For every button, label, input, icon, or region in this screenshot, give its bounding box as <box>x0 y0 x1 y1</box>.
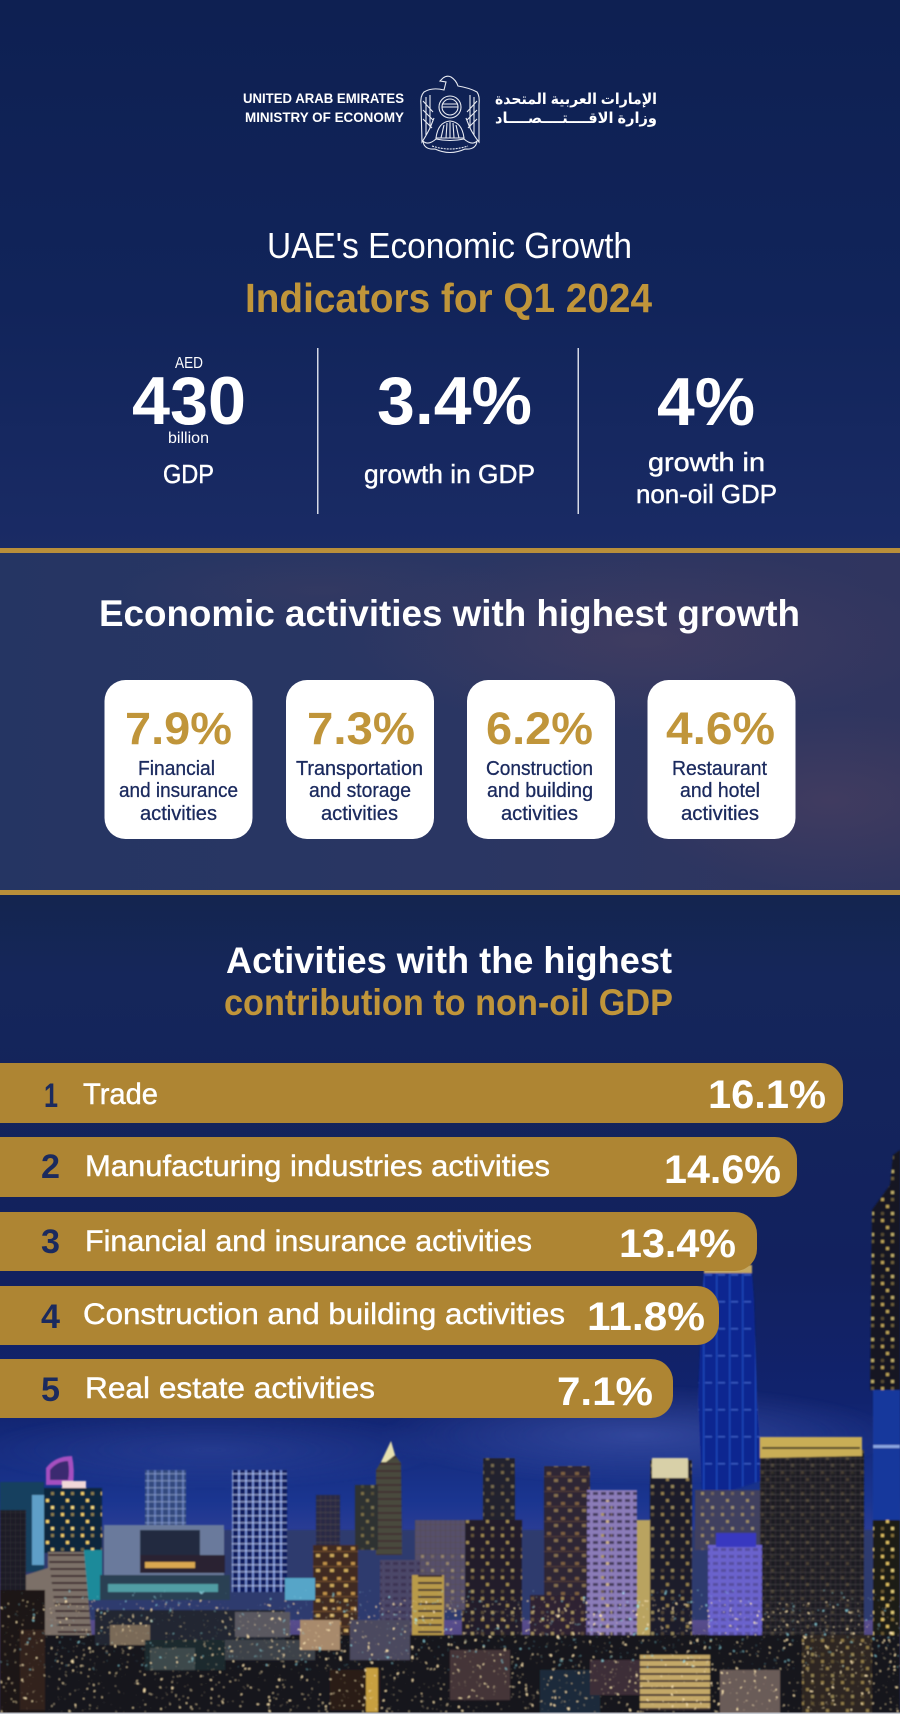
heading: highest contribution <box>224 940 673 1023</box>
olive spire tower <box>316 1441 402 1555</box>
stat: AED 430 billion GDP: billion <box>168 430 209 447</box>
card: restaurant: activities <box>681 803 759 825</box>
purple tall building <box>587 1490 650 1690</box>
ministry name English <box>243 91 404 125</box>
bar 2: manufacturing: 14.6% <box>664 1148 781 1192</box>
icon: UAE eagle emblem <box>421 76 479 152</box>
heading: highest contribution: contribution to non-oil GDP <box>224 982 673 1023</box>
bar 2: manufacturing: 2 <box>41 1148 60 1186</box>
card: transportation: 7.3% <box>307 703 415 754</box>
ministry name Arabic: الإمارات العربية المتحدة <box>495 91 657 108</box>
card: construction: activities <box>501 803 578 825</box>
bar 4: construction: Construction and building activities <box>83 1298 565 1331</box>
large dark building with lit crown <box>760 1437 864 1650</box>
stat: AED 430 billion GDP: GDP <box>163 459 214 489</box>
bar 3: financial: Financial and insurance activities <box>85 1225 532 1258</box>
dark towers middle <box>415 1458 692 1690</box>
brown building orange windows <box>313 1545 358 1640</box>
bar 4: construction: 4 <box>41 1298 60 1336</box>
foreground city <box>0 1590 900 1714</box>
bar 5: real estate: Real estate activities <box>85 1372 375 1405</box>
card: construction: 6.2% <box>486 703 593 754</box>
ministry name English: UNITED ARAB EMIRATES <box>243 91 404 106</box>
far horizon <box>0 1530 900 1620</box>
card: construction: Construction <box>486 758 593 780</box>
card: financial <box>104 680 252 839</box>
card: financial: and insurance <box>119 780 238 802</box>
title <box>245 225 652 321</box>
card: restaurant: 4.6% <box>666 703 775 754</box>
purple-lit mid building <box>708 1533 762 1645</box>
card: transportation: and storage <box>309 780 411 802</box>
stat: AED 430 billion GDP: AED <box>175 355 203 372</box>
blue tall building <box>232 1470 287 1592</box>
tan slab left <box>26 1552 92 1650</box>
chart: non-oil GDP contribution bars <box>0 1063 843 1418</box>
grey-blue lit building <box>104 1470 224 1575</box>
heading: highest contribution: Activities with the highest <box>226 940 672 981</box>
bar 3: financial <box>0 1212 757 1271</box>
ministry name English: MINISTRY OF ECONOMY <box>245 110 404 125</box>
bar 3: financial: 13.4% <box>619 1222 736 1266</box>
card: transportation <box>286 680 434 839</box>
card: construction: and building <box>487 780 593 802</box>
city skyline photo <box>0 1150 900 1714</box>
stat: 3.4% growth in GDP: growth in GDP <box>364 459 535 489</box>
heading: economic activities: Economic activities with highest growth <box>99 593 800 634</box>
bar 1: trade: Trade <box>83 1078 158 1111</box>
ministry name Arabic <box>495 91 657 127</box>
blue glass tower <box>698 1265 763 1500</box>
bar 5: real estate: 7.1% <box>557 1370 653 1414</box>
title: UAE's Economic Growth <box>267 225 632 266</box>
bar 4: construction <box>0 1286 719 1345</box>
right dark tower upper <box>870 1150 900 1714</box>
card: construction <box>467 680 615 839</box>
bar 2: manufacturing: Manufacturing industries activities <box>85 1150 550 1183</box>
stat: 4% growth in non-oil GDP <box>636 364 777 509</box>
bar 1: trade: 1 <box>44 1077 58 1115</box>
card: financial: activities <box>140 803 217 825</box>
panel: highest growth cards <box>104 680 796 839</box>
bar 4: construction: 11.8% <box>587 1295 705 1339</box>
bar 1: trade: 16.1% <box>708 1073 826 1117</box>
stat: 3.4% growth in GDP: 3.4% <box>377 363 532 439</box>
card: restaurant <box>648 680 796 839</box>
stat: 4% growth in non-oil GDP: 4% <box>657 364 755 440</box>
stat: 4% growth in non-oil GDP: growth in <box>648 447 765 477</box>
left neon buildings <box>0 1456 102 1620</box>
card: transportation: Transportation <box>296 758 423 780</box>
panel: headline indicators <box>132 348 777 514</box>
card: financial: 7.9% <box>125 703 232 754</box>
ministry name Arabic: وزارة الاقــــتــــصــــاد <box>495 110 657 127</box>
stat: 3.4% growth in GDP <box>364 363 535 489</box>
bar 1: trade <box>0 1063 843 1123</box>
bar 5: real estate: 5 <box>41 1371 60 1409</box>
stat: AED 430 billion GDP <box>132 355 246 489</box>
card: restaurant: and hotel <box>680 780 760 802</box>
bar 2: manufacturing <box>0 1137 797 1197</box>
stat: AED 430 billion GDP: 430 <box>132 363 246 439</box>
stat: 4% growth in non-oil GDP: non-oil GDP <box>636 479 777 509</box>
title: Indicators for Q1 2024 <box>245 275 652 321</box>
card: transportation: activities <box>321 803 398 825</box>
card: financial: Financial <box>138 758 215 780</box>
card: restaurant: Restaurant <box>672 758 767 780</box>
lit podiums <box>100 1555 586 1655</box>
bar 5: real estate <box>0 1359 673 1418</box>
header: ministry logo block <box>243 76 657 152</box>
bar 3: financial: 3 <box>41 1223 60 1261</box>
